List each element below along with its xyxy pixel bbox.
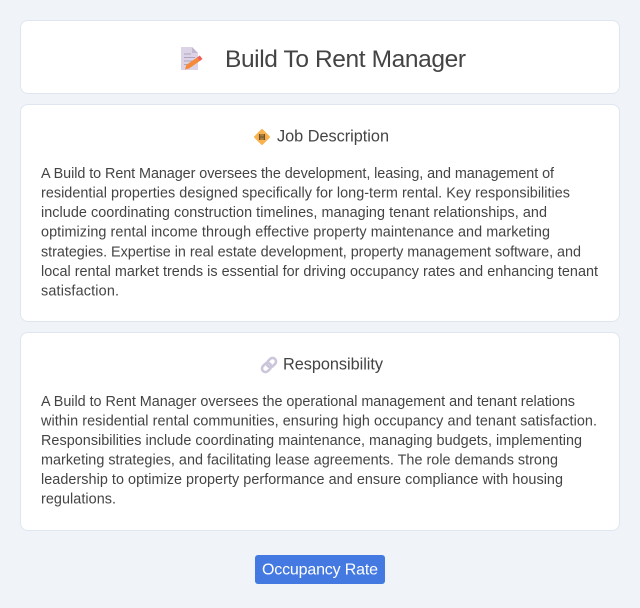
- text block: responsibility: marketing strategies, and facilitating lease agreements. The role demands strong: [41, 452, 558, 468]
- text block: job description: strategies. Expertise in real estate development, property management software, and: [41, 244, 581, 260]
- text block: responsibility: Responsibilities include coordinating maintenance, managing budgets, implementing: [41, 433, 582, 449]
- text block: job description: include coordinating construction timelines, managing tenant relationships, and: [41, 205, 547, 221]
- text block: job description: local rental market trends is essential for driving occupancy rates and enhancing tenant: [41, 264, 598, 280]
- panel: title header: [20, 20, 620, 94]
- panel: job description: [20, 104, 620, 322]
- text block: responsibility: regulations.: [41, 492, 116, 508]
- button: occupancy rate: [255, 555, 385, 584]
- text block: job description: optimizing rental income through effective property maintenance and marketing: [41, 224, 550, 240]
- icon: orange diamond sign: [254, 129, 270, 145]
- heading: responsibility: Responsibility: [283, 356, 384, 374]
- text block: responsibility: A Build to Rent Manager oversees the operational management and tenant relations: [41, 394, 575, 410]
- text block: job description: residential properties designed specifically for long-term rental. Key responsibilities: [41, 186, 570, 202]
- panel: responsibility: [20, 332, 620, 531]
- text block: responsibility: [40, 394, 597, 508]
- text block: job description: satisfaction.: [41, 284, 119, 300]
- text block: responsibility: leadership to optimize property performance and ensure compliance with housing: [41, 472, 563, 488]
- button: occupancy rate: Occupancy Rate: [262, 562, 378, 578]
- heading: job description: Job Description: [277, 128, 389, 146]
- title: Build To Rent Manager: [225, 46, 466, 73]
- icon: document with pencil: [181, 47, 202, 70]
- text block: responsibility: within residential rental communities, ensuring high occupancy and tenant satisfaction.: [40, 414, 597, 430]
- text block: job description: [41, 166, 598, 300]
- icon: chain link: [260, 356, 278, 374]
- text block: job description: A Build to Rent Manager oversees the development, leasing, and management of: [41, 166, 555, 182]
